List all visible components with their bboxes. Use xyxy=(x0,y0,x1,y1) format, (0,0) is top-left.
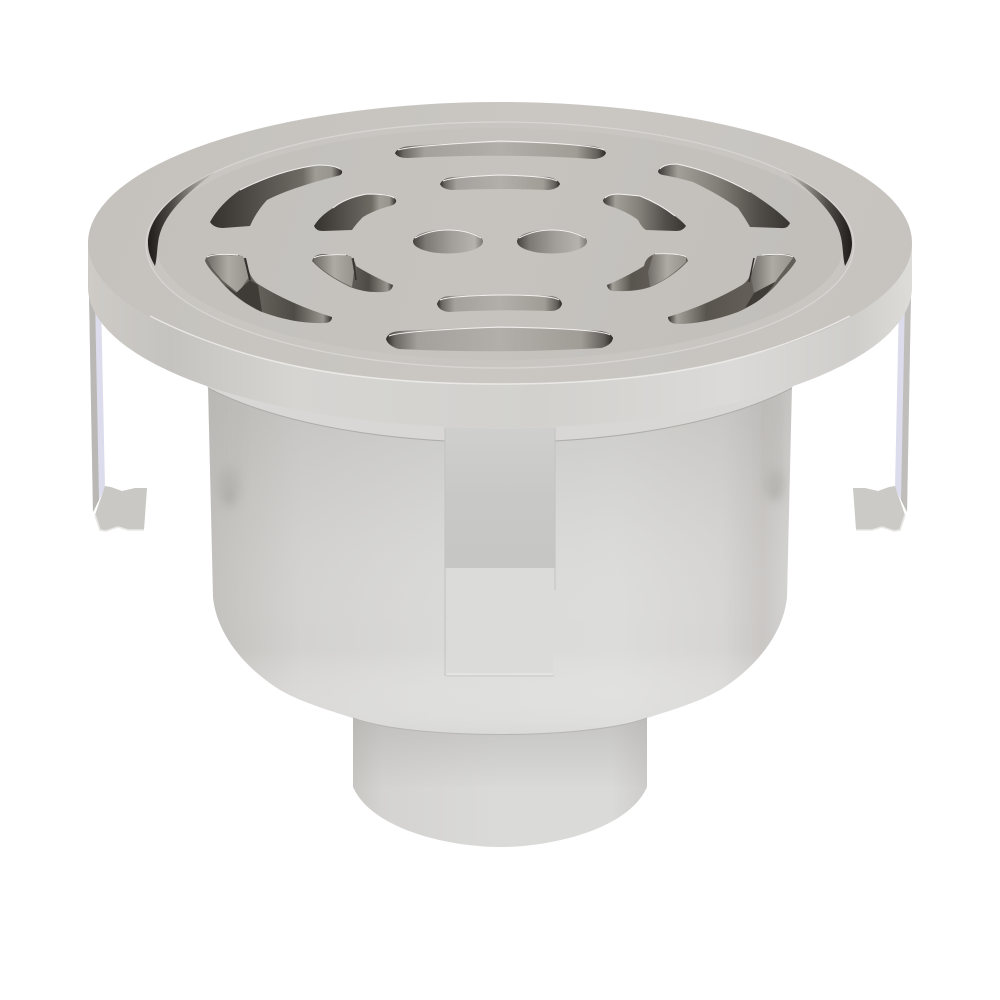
slot: upper left inner xyxy=(314,194,396,231)
illustration: stainless steel floor drain xyxy=(88,102,912,847)
slot: lower right outer xyxy=(668,254,796,324)
slot: lower left inner xyxy=(312,254,393,292)
recess shadow: right xyxy=(785,172,852,266)
slot: centre right hole xyxy=(517,230,587,254)
slot: lower outer xyxy=(386,327,613,351)
flange top surface xyxy=(88,102,912,384)
outlet pipe xyxy=(353,710,647,847)
grate plate xyxy=(148,128,852,360)
flange edge highlight xyxy=(150,316,850,384)
spring clip: centre xyxy=(445,427,555,676)
slot: centre left hole xyxy=(413,230,483,254)
drain body xyxy=(200,385,800,745)
recess ring xyxy=(146,122,854,368)
slot: lower right inner xyxy=(607,254,688,291)
slot: upper left outer xyxy=(210,165,342,228)
flange side lip xyxy=(88,243,912,428)
spring clip: left xyxy=(89,294,147,531)
body collar under flange xyxy=(200,370,800,441)
slot: top outer xyxy=(395,141,606,159)
slot: upper right outer xyxy=(658,164,790,228)
slot: lower inner xyxy=(437,295,562,312)
recess shadow: left xyxy=(148,172,215,266)
slot: top inner xyxy=(440,175,560,190)
slot: upper right inner xyxy=(603,194,686,231)
spring clip: right xyxy=(853,294,911,531)
slot: lower left outer xyxy=(205,254,332,323)
